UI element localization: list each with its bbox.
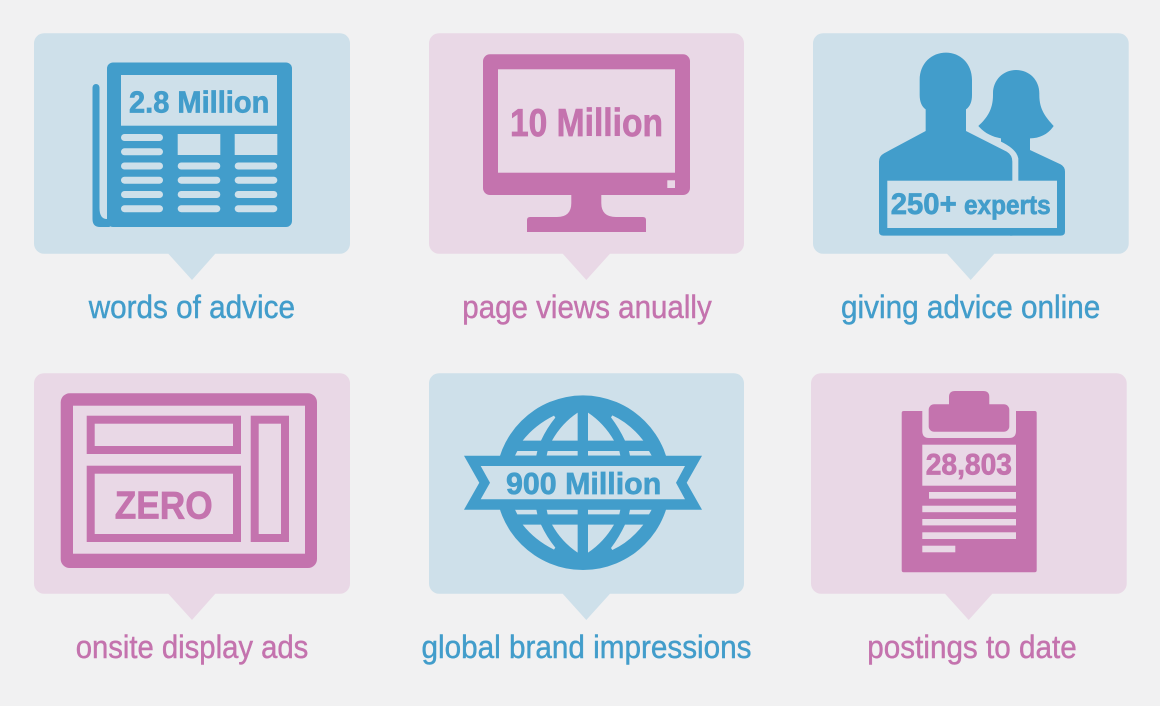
stat: 10 Million: 10 Million [510,102,663,145]
icon: two people [879,53,1065,236]
caption: page views anually [462,289,712,325]
stat: 250+ experts: experts [964,190,1051,220]
speech bubble [429,33,744,280]
panel: postings to date [811,373,1127,665]
stat: 2.8 Million: 2.8 Million [129,85,269,120]
panel: global brand impressions [422,373,752,665]
icon: monitor [483,54,690,232]
panel: page views annually [429,33,744,325]
stat: 28,803: 28,803 [926,449,1012,482]
stat: 900 Million: 900 Million [506,466,661,501]
speech bubble [429,373,744,620]
caption: global brand impressions [422,629,752,665]
icon: globe with ribbon [464,395,702,570]
speech bubble [811,373,1127,620]
speech bubble [34,373,350,620]
icon: clipboard [902,391,1037,572]
caption: words of advice [88,289,295,325]
caption: giving advice online [841,289,1100,325]
caption: postings to date [867,629,1077,665]
speech bubble [813,33,1129,280]
icon: newspaper [92,62,292,227]
stat: ZERO: ZERO [115,484,213,527]
caption: onsite display ads [76,629,308,665]
stat: 250+ experts: 250+ [891,188,957,221]
panel: words of advice [34,33,350,325]
speech bubble [34,33,350,280]
panel: onsite display ads [34,373,350,665]
panel: giving advice online [813,33,1129,325]
icon: web page layout [61,393,317,568]
